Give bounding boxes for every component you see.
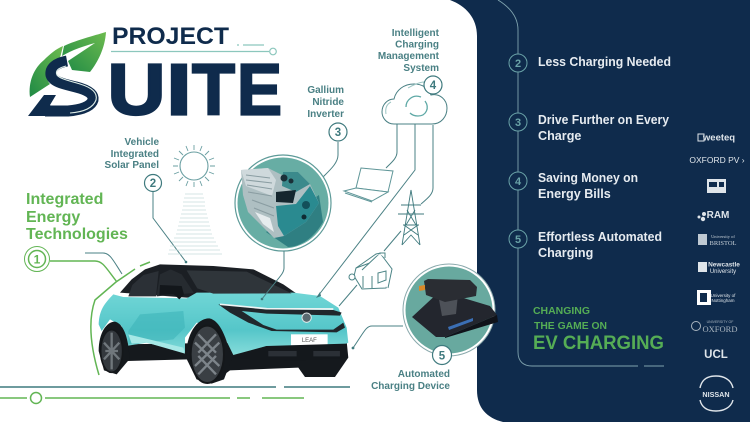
tagline: THE GAME ON	[534, 321, 607, 332]
suite word: U	[108, 49, 166, 130]
logo: University of Nottingham	[697, 290, 736, 305]
icon: leaf upper lobe	[62, 32, 106, 72]
ground lines	[0, 387, 350, 404]
benefit 5	[509, 230, 662, 260]
label: vehicle integrated solar panel: Solar Panel	[105, 160, 159, 171]
lower door highlight	[128, 334, 185, 354]
label: vehicle integrated solar panel: Integrated	[111, 149, 159, 160]
lower dark body	[105, 341, 348, 383]
benefit 3: Drive Further on Every	[538, 113, 669, 127]
icon: cloud with marker 4: 4	[430, 80, 437, 92]
benefit 4	[509, 171, 638, 201]
suite word	[108, 49, 282, 130]
logo: Newcastle University: Newcastle	[708, 262, 740, 268]
logo: Oxford PV: OXFORD PV ›	[689, 155, 745, 165]
connector: engine to car	[262, 251, 284, 299]
marker 5: 5	[439, 350, 446, 362]
charger device circle	[352, 264, 498, 356]
benefit 4: 4	[515, 176, 522, 188]
benefit 5: Charging	[538, 246, 593, 260]
teal body	[99, 293, 348, 355]
heading: Integrated Energy Technologies: Integrated	[26, 191, 103, 208]
label: gallium nitride inverter: Inverter	[307, 109, 344, 120]
label: intelligent charging management system: Charging	[395, 40, 439, 50]
benefit 3	[509, 113, 669, 143]
logo: UCL: UCL	[704, 349, 728, 361]
benefit 5: Effortless Automated	[538, 230, 662, 244]
icon: road S	[28, 61, 96, 116]
benefit 3: Charge	[538, 129, 581, 143]
heading: Integrated Energy Technologies: Technologies	[26, 226, 128, 243]
front side window	[157, 269, 194, 296]
tagline	[533, 306, 664, 354]
suite word: T	[192, 49, 235, 130]
device base	[412, 291, 497, 337]
logo: University of Oxford: OXFORD	[703, 324, 737, 334]
badge	[302, 313, 311, 322]
logo: University of Oxford	[692, 320, 737, 334]
arrow head: car connector	[316, 292, 321, 298]
suite word: I	[166, 49, 192, 130]
label: intelligent charging management system: Intelligent	[392, 28, 440, 39]
tagline: EV CHARGING	[533, 332, 664, 354]
side timeline	[498, 0, 664, 366]
marker 3 with connector	[322, 123, 347, 178]
logo: University of Oxford: UNIVERSITY OF	[707, 320, 733, 324]
benefit 4: Energy Bills	[538, 187, 611, 201]
icon: cloud with marker 4	[382, 76, 447, 124]
icon: laptop	[344, 168, 393, 202]
marker 2 with connector: 2	[150, 178, 156, 190]
number plate: LEAF	[302, 338, 317, 344]
label: intelligent charging management system: Management	[378, 51, 440, 62]
benefit 5: 5	[515, 234, 521, 246]
logo: Project SUITE	[28, 23, 282, 130]
device stand	[438, 294, 458, 316]
tagline: CHANGING	[533, 306, 590, 317]
connector: house to car	[339, 285, 357, 306]
icon: pylon	[398, 190, 424, 245]
car outline arc	[91, 262, 150, 375]
label: gallium nitride inverter: Nitride	[312, 97, 344, 108]
heading: Integrated Energy Technologies	[26, 191, 128, 243]
logo: RAM: RAM	[707, 210, 729, 221]
label: vehicle integrated solar panel: Vehicle	[125, 137, 159, 148]
logo: University of Bristol: BRISTOL	[710, 240, 737, 247]
roof	[120, 264, 297, 298]
label: gallium nitride inverter: Gallium	[307, 85, 344, 96]
mirror	[159, 285, 184, 299]
logo: Newcastle University: University	[710, 269, 736, 275]
label: vehicle integrated solar panel	[105, 137, 159, 171]
label: automated charging device: Automated	[398, 369, 450, 380]
icon: sun	[173, 145, 215, 187]
benefit 3: 3	[515, 117, 521, 129]
logo: University of Bristol: University of	[711, 234, 735, 239]
icon: sun rays	[168, 194, 222, 254]
logo: weeteq: weeteq	[702, 132, 735, 144]
rear wheel	[99, 322, 129, 374]
headlight band	[218, 304, 345, 332]
number plate	[291, 334, 328, 345]
label: intelligent charging management system	[378, 28, 440, 74]
connector: pylon to house	[384, 231, 401, 251]
logo: Nissan	[700, 376, 733, 411]
benefit 2	[509, 54, 671, 72]
benefit 2: 2	[515, 58, 521, 70]
heading: Integrated Energy Technologies: Energy	[26, 209, 80, 226]
logo: Newcastle University	[698, 262, 740, 275]
marker 5	[432, 346, 452, 364]
marker 3 with connector: 3	[335, 127, 341, 139]
marker 1 with connector: 1	[34, 252, 41, 266]
icon: leaf lower lobe	[30, 46, 63, 97]
car: Nissan Leaf	[99, 264, 348, 384]
logo: University of Nottingham: Nottingham	[711, 298, 735, 303]
marker 2 with connector	[144, 174, 187, 263]
benefit 4: Saving Money on	[538, 171, 638, 185]
label: gallium nitride inverter	[307, 85, 344, 120]
connector: cloud to car	[318, 124, 415, 296]
benefit 2: Less Charging Needed	[538, 55, 671, 69]
engine illustration	[235, 155, 331, 251]
connector: cloud to pylon	[421, 125, 433, 204]
logo divider line	[111, 45, 276, 55]
windshield	[187, 270, 292, 294]
suite word: E	[237, 49, 282, 130]
label: intelligent charging management system: System	[403, 63, 439, 74]
project word: PROJECT	[112, 23, 229, 50]
label: automated charging device: Charging Device	[371, 381, 450, 392]
door shading	[128, 311, 185, 344]
vehicle connector line	[85, 253, 122, 274]
device head	[424, 279, 477, 302]
grille	[230, 344, 347, 360]
panel: navy benefits background	[450, 0, 750, 422]
logo: R badge	[707, 179, 726, 193]
partner logos	[689, 132, 745, 411]
logo: University of Nottingham: University of	[711, 293, 736, 298]
rear window	[128, 271, 159, 296]
icon: house	[349, 253, 392, 289]
connector: cloud to laptop	[386, 124, 397, 168]
label: automated charging device	[371, 369, 450, 392]
logo: Nissan: NISSAN	[702, 390, 730, 399]
marker 1 with connector	[24, 246, 117, 282]
front wheel	[186, 318, 232, 384]
logo: University of Bristol	[698, 234, 737, 247]
